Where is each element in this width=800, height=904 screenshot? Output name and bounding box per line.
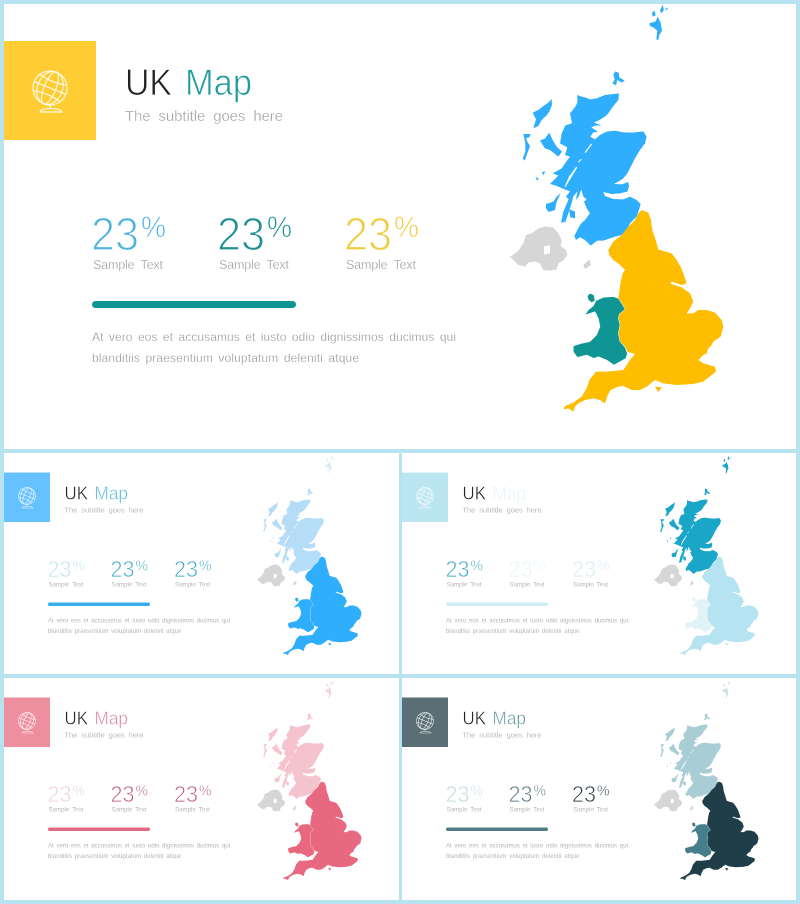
stat 1: 23	[91, 208, 139, 260]
title	[462, 482, 526, 504]
stat 1: 23	[48, 556, 72, 582]
stat 3	[344, 208, 419, 272]
stat 1: 23	[48, 781, 72, 807]
stat 1: %	[470, 558, 483, 574]
stat 1: Sample Text	[48, 582, 84, 588]
stat 3	[174, 781, 212, 814]
stat 1: Sample Text	[446, 582, 482, 588]
stat 3: %	[199, 782, 212, 800]
map of UK	[257, 681, 362, 880]
body text: blanditiis praesentium voluptatum deleniti atque	[446, 854, 580, 860]
stat 2	[508, 556, 546, 588]
stat 1: 23	[446, 781, 470, 807]
title	[462, 708, 526, 728]
stat 2: 23	[508, 781, 532, 807]
stat 3: Sample Text	[573, 806, 608, 814]
panel: dark teal slide	[402, 678, 796, 900]
stat 2: 23	[110, 781, 134, 807]
stat 3: Sample Text	[175, 582, 210, 588]
title: UK	[462, 482, 487, 504]
stat 1: 23	[446, 556, 470, 582]
stat 2: Sample Text	[510, 582, 545, 588]
body text	[446, 844, 628, 860]
progress bar	[446, 602, 548, 606]
stat 1	[48, 781, 85, 814]
progress bar	[48, 828, 150, 831]
stat 2: %	[534, 558, 546, 574]
stat 2: 23	[508, 556, 532, 582]
stat 3: 23	[344, 208, 392, 260]
map of UK	[654, 681, 759, 880]
stat 2: Sample Text	[510, 806, 545, 814]
panel: cyan slide	[402, 453, 796, 674]
body text: At vero eos et accusamus et iusto odio dignissimos ducimus qui	[48, 618, 230, 624]
map of UK	[510, 5, 723, 412]
stat 2: Sample Text	[112, 806, 147, 814]
title	[64, 482, 128, 504]
icon box: globe on yellow	[4, 41, 96, 140]
progress bar	[48, 602, 150, 606]
stat 2	[508, 781, 546, 814]
body text	[92, 330, 456, 365]
stat 3: 23	[174, 781, 198, 807]
stat 1: %	[72, 558, 85, 574]
panel: pink slide	[4, 678, 399, 900]
stat 2: 23	[217, 208, 265, 260]
panel: blue slide	[4, 453, 399, 674]
title	[125, 62, 252, 103]
subtitle: The subtitle goes here	[64, 506, 144, 514]
title: Map	[185, 62, 252, 103]
map of UK	[257, 456, 362, 655]
body text: At vero eos et accusamus et iusto odio dignissimos ducimus qui	[48, 844, 230, 850]
map of UK	[654, 456, 759, 655]
title: Map	[492, 482, 526, 504]
subtitle: The subtitle goes here	[462, 506, 542, 514]
stat 2	[110, 556, 148, 588]
stat 3: %	[597, 782, 610, 800]
progress bar	[92, 301, 296, 308]
stat 1: Sample Text	[93, 258, 164, 272]
stat 1: Sample Text	[48, 806, 84, 814]
stat 3	[572, 556, 610, 588]
stat 3: 23	[572, 781, 596, 807]
stat 2: %	[267, 211, 292, 244]
panel: main yellow slide	[4, 4, 796, 449]
stat 1	[446, 781, 483, 814]
stat 2: %	[534, 782, 546, 800]
stat 2: Sample Text	[219, 258, 290, 272]
subtitle: The subtitle goes here	[64, 730, 144, 740]
stat 3: 23	[174, 556, 198, 582]
title: Map	[492, 708, 526, 728]
stat 2: 23	[110, 556, 134, 582]
stat 2: Sample Text	[112, 582, 147, 588]
subtitle: The subtitle goes here	[462, 730, 542, 740]
title: Map	[94, 482, 128, 504]
stat 1	[48, 556, 85, 588]
body text: At vero eos et accusamus et iusto odio dignissimos ducimus qui	[92, 330, 456, 344]
body text: blanditiis praesentium voluptatum deleniti atque	[446, 629, 580, 635]
stat 3: %	[199, 558, 212, 574]
title	[64, 708, 128, 728]
title: UK	[462, 708, 487, 728]
body text: blanditiis praesentium voluptatum deleniti atque	[48, 854, 182, 860]
stat 1: Sample Text	[446, 806, 482, 814]
title: UK	[64, 482, 89, 504]
stat 2: %	[136, 558, 148, 574]
body text: At vero eos et accusamus et iusto odio dignissimos ducimus qui	[446, 844, 628, 850]
icon box: globe on pink	[4, 698, 50, 747]
stat 1	[446, 556, 483, 588]
body text: blanditiis praesentium voluptatum deleniti atque	[92, 351, 359, 365]
stat 3: 23	[572, 556, 596, 582]
progress bar	[446, 828, 548, 831]
body text	[446, 618, 628, 635]
stat 2: %	[136, 782, 148, 800]
stat 1: %	[470, 782, 483, 800]
title: UK	[125, 62, 172, 103]
stat 2	[110, 781, 148, 814]
stat 1	[91, 208, 166, 272]
stat 1: %	[72, 782, 85, 800]
body text: At vero eos et accusamus et iusto odio dignissimos ducimus qui	[446, 618, 628, 624]
stat 3	[174, 556, 212, 588]
stat 1: %	[141, 211, 166, 244]
icon box: globe on blue	[4, 472, 50, 522]
stat 3: %	[394, 211, 419, 244]
title: Map	[94, 708, 128, 728]
icon box: globe on pale cyan	[402, 472, 448, 522]
icon box: globe on slate	[402, 698, 448, 747]
stat 3	[572, 781, 610, 814]
title: UK	[64, 708, 89, 728]
stat 3: Sample Text	[175, 806, 210, 814]
body text	[48, 618, 230, 635]
stat 3: Sample Text	[346, 258, 417, 272]
stat 2	[217, 208, 292, 272]
subtitle: The subtitle goes here	[125, 108, 283, 125]
stat 3: Sample Text	[573, 582, 608, 588]
body text	[48, 844, 230, 860]
body text: blanditiis praesentium voluptatum deleniti atque	[48, 629, 182, 635]
stat 3: %	[597, 558, 610, 574]
